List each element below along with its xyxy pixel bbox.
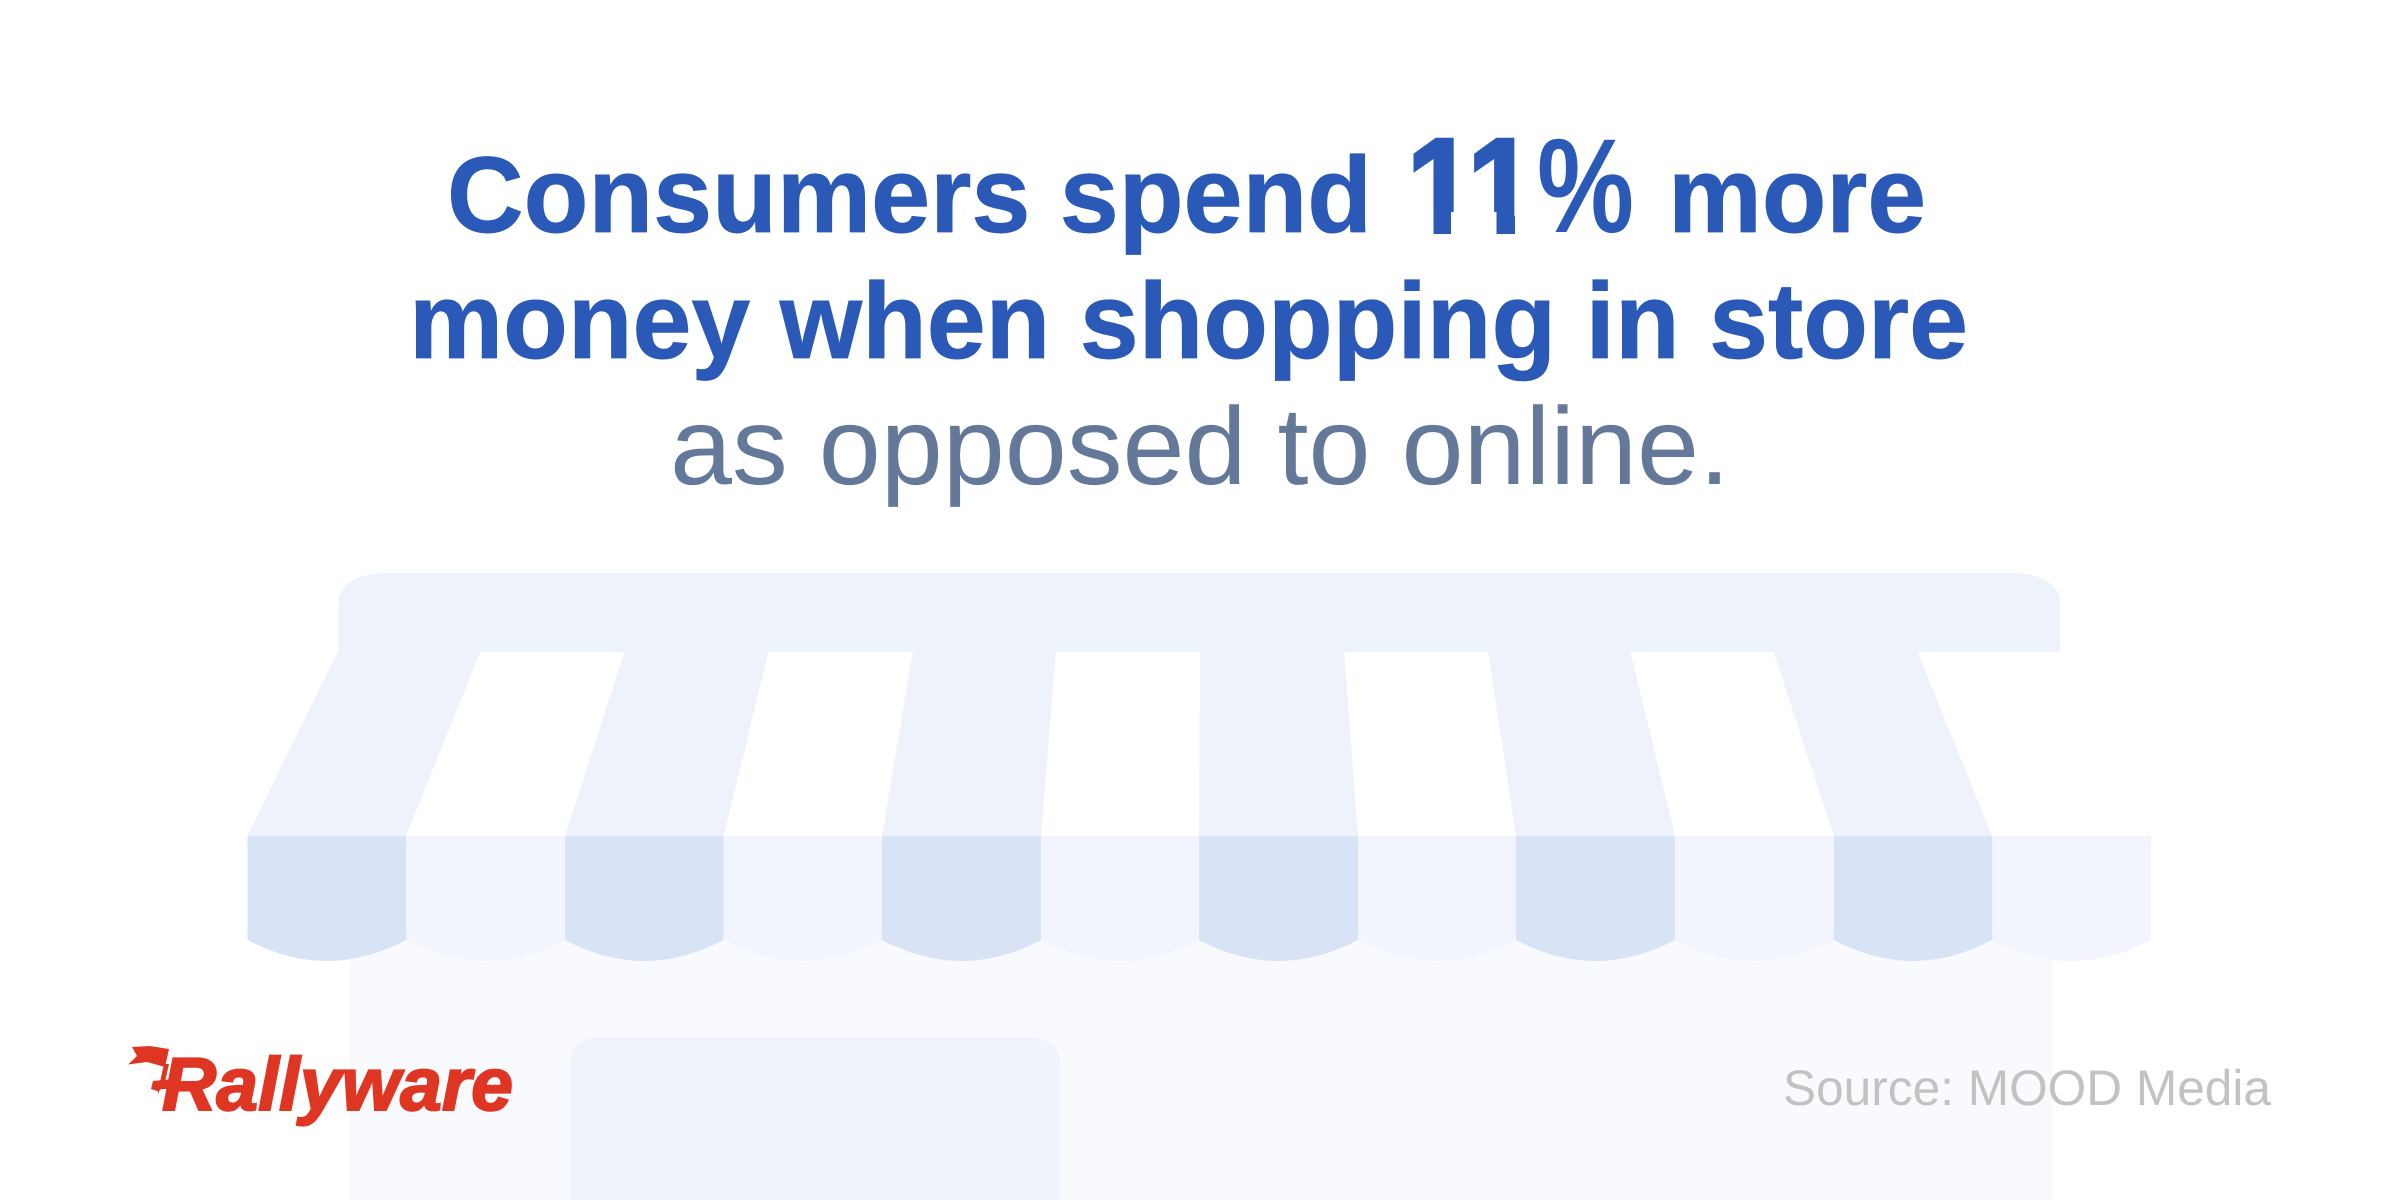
headline line 1: % (1537, 112, 1634, 261)
headline line 1: more (1668, 134, 1926, 255)
logo: Rallyware (128, 1042, 513, 1126)
title headline (409, 112, 1968, 508)
headline line 1: 11 (1407, 112, 1535, 261)
awning roof bar and slanted stripes (248, 573, 2060, 836)
wordmark: Rallyware (162, 1042, 513, 1126)
headline line 3: as opposed to online. (670, 385, 1730, 508)
icon: flag (128, 1046, 174, 1094)
awning valance dark scallops (248, 836, 1992, 961)
headline line 1 (450, 138, 1923, 255)
headline line 2: money when shopping in store (409, 260, 1968, 381)
headline line 1: Consumers spend (447, 134, 1372, 255)
panel: storefront illustration (248, 573, 2151, 1200)
store wall (349, 900, 2052, 1200)
store window (570, 1038, 1060, 1200)
source credit: Source: MOOD Media (1783, 1060, 2271, 1116)
awning valance light scallops (406, 836, 2151, 961)
